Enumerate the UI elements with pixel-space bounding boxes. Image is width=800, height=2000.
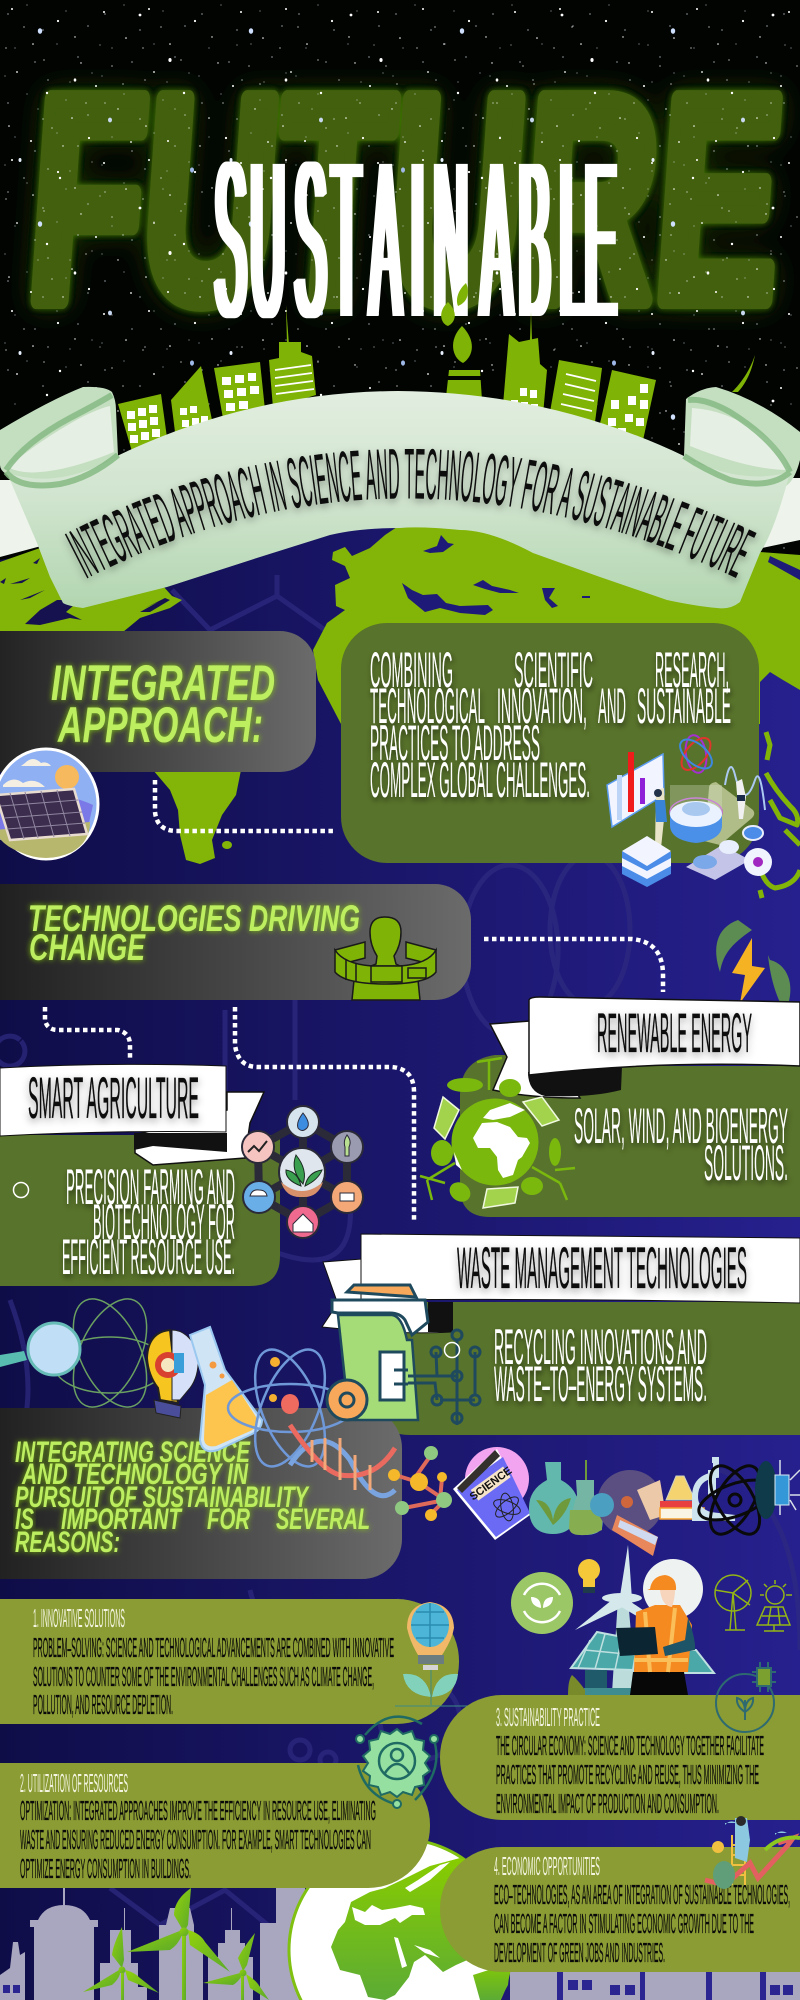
icon: bulb with plant: [578, 1559, 600, 1593]
faint background pattern: [0, 575, 800, 1935]
panel: smart agriculture: [0, 1064, 280, 1286]
engineer body: [630, 1672, 688, 1695]
text: PRECISION FARMING AND: [66, 1159, 235, 1215]
icon: black atom: [694, 1458, 776, 1542]
icon: light bulb with gears: [147, 1330, 198, 1418]
lower right buildings: [510, 1972, 800, 2000]
description text: TECHNOLOGICAL: [370, 678, 485, 734]
building 3: [214, 362, 265, 424]
heading: integrated approach: INTEGRATED: [51, 655, 275, 711]
turbine 1: [127, 1888, 230, 2000]
card 2: utilization of resources: [0, 1763, 430, 1888]
heading: integrated approach: APPROACH:: [57, 697, 263, 753]
building 1: [118, 394, 168, 455]
ribbon curl folds: [6, 395, 790, 486]
clipboard: [616, 1627, 658, 1656]
factory: [0, 1942, 25, 2000]
description text: [370, 642, 731, 808]
icon: person at screens: [335, 917, 436, 1000]
solar panels: [571, 1632, 638, 1670]
waste management text: [494, 1319, 707, 1412]
windows in buildings: [3, 1972, 793, 2000]
starfield: [0, 0, 800, 600]
wind turbine: [575, 1545, 643, 1693]
icon: recycling leaves badge: [511, 1572, 573, 1634]
card 1 body: [33, 1632, 394, 1720]
panel: integrated approach description: [341, 623, 759, 863]
text: BIOTECHNOLOGY FOR: [93, 1194, 235, 1250]
heading: technologies driving change: CHANGE: [29, 927, 146, 968]
ribbon left curl inner: [8, 406, 114, 472]
panel: waste management: [322, 1234, 800, 1435]
ribbon tails: [0, 478, 800, 557]
stepped tower 3: [208, 1908, 253, 2000]
icon: solar panel badge: [0, 749, 98, 859]
land: South America: [153, 770, 241, 864]
city skyline bottom: [0, 1888, 800, 2000]
card 3 body: [496, 1730, 764, 1819]
navy inlets on the land: [402, 535, 800, 615]
stepped tower 2: [159, 1908, 203, 2000]
icon: flask with orange liquid: [190, 1327, 262, 1451]
chimney with leaves: [441, 283, 482, 400]
icon: line-art turbine and solar panel: [715, 1575, 792, 1631]
icon: science and data isometric illustration: [607, 733, 772, 887]
icon: gear with person and arrows: [356, 1717, 438, 1808]
icon: microscope and books: [660, 1460, 735, 1519]
card 4: economic opportunities: [440, 1847, 800, 1972]
description text: COMBINING: [370, 642, 453, 698]
building 5: [503, 312, 547, 415]
ribbon band: [7, 391, 790, 608]
heading: technologies driving change: [28, 898, 360, 968]
icon: telescope and planets: [590, 1470, 666, 1556]
card 1: innovative solutions: 1. INNOVATIVE SOLUTIONS: [33, 1603, 125, 1633]
tall tower: [260, 1888, 305, 2000]
ribbon left curl: [0, 387, 118, 486]
land: Europe and Africa: [313, 525, 800, 724]
description text: AND: [598, 678, 626, 734]
icon: green earth bottom: [289, 1839, 512, 2000]
card 4 body: [494, 1879, 790, 1968]
dotted connector lines: [45, 780, 663, 1222]
heading: integrating science and technology: INTEGRATING SCIENCE: [15, 1436, 251, 1469]
small ring marker: [14, 1182, 28, 1198]
panel: integrated approach heading: [0, 631, 316, 772]
card 1 body: POLLUTION, AND RESOURCE DEPLETION.: [33, 1689, 173, 1720]
ribbon: renewable energy: [490, 997, 800, 1098]
ribbon: waste management: [322, 1234, 800, 1333]
card 2: utilization of resources: 2. UTILIZATION OF RESOURCES: [20, 1768, 128, 1798]
white halo: [643, 1559, 703, 1619]
heading: integrated approach: [51, 655, 275, 753]
icon: science book: SCIENCE: [468, 1465, 514, 1503]
text: SMART AGRICULTURE: [28, 1066, 199, 1131]
land: Asia islands: [760, 732, 800, 898]
icon: magnifying glass and green atom: [0, 1288, 166, 1418]
panel: renewable energy: [460, 997, 800, 1217]
icon: waste bin with circuit: [327, 1285, 480, 1425]
ribbon: smart agriculture: [0, 1064, 264, 1165]
icon: wind turbines: [83, 1888, 269, 2000]
card 2 body: OPTIMIZE ENERGY CONSUMPTION IN BUILDINGS.: [20, 1853, 191, 1884]
heading: integrating science and technology: PURSUIT OF SUSTAINABILITY: [15, 1481, 310, 1514]
panel: technologies driving change: [0, 884, 471, 1000]
icon: lightning with leaves: [698, 920, 790, 1031]
globe: green land masses: [0, 525, 800, 898]
globe: navy ocean: [0, 525, 800, 2000]
icon: circular plant with chip: [716, 1662, 776, 1732]
card 1: innovative solutions: [0, 1599, 459, 1724]
icon: green globe with solar panels and turbines: [420, 1058, 575, 1208]
building 2: [171, 366, 213, 440]
city skyline on the globe: [118, 283, 755, 455]
grass blade: [732, 355, 755, 392]
building 7: [599, 370, 656, 445]
hard hat and face: [660, 1590, 675, 1607]
heading: integrating science and technology: [15, 1436, 370, 1559]
icon: growth chart with ladder: [705, 1816, 800, 1889]
stepped tower 1: [100, 1908, 147, 2000]
icon: molecule: [388, 1446, 452, 1521]
description text: SCIENTIFIC: [514, 642, 593, 698]
card 2 body: [20, 1795, 376, 1884]
land: left continent: [0, 548, 182, 632]
icon: globe light bulb with leaves: [395, 1602, 470, 1706]
renewable energy text: [574, 1098, 788, 1191]
text: EFFICIENT RESOURCE USE.: [62, 1229, 235, 1285]
heading: integrating science and technology: SEVERAL: [276, 1503, 370, 1536]
heading: technologies driving change: TECHNOLOGIES DRIVING: [28, 898, 360, 939]
building 6: [550, 360, 602, 430]
ribbon right curl inner: [690, 408, 788, 470]
background: space: [0, 0, 800, 640]
title: SUSTAINABLE: SUSTAINABLE: [215, 113, 616, 366]
navy inlets on left land: [0, 558, 170, 625]
heading: integrating science and technology: IMPORTANT: [61, 1503, 183, 1536]
illustration: engineer with wind turbine and solar panels: [568, 1545, 714, 1696]
smart agriculture text: [62, 1159, 235, 1285]
land: small island: [222, 841, 232, 849]
icon: microchip: [755, 1460, 800, 1519]
dome tower: [30, 1905, 98, 2000]
ribbon banner: INTEGRATED APPROACH IN SCIENCE AND TECHNOLOGY FOR A SUSTAINABLE FUTURE: [64, 448, 760, 584]
turbine 2: [83, 1927, 159, 2000]
icon: smart farming hexagon network: [242, 1106, 363, 1238]
icon: plant flasks: [529, 1460, 603, 1535]
panel: why integration is important: [0, 1408, 402, 1579]
icon: DNA helix: [290, 1425, 395, 1496]
heading: integrating science and technology: FOR: [207, 1503, 250, 1536]
icon: science book: [453, 1447, 530, 1540]
building 4: [269, 305, 316, 408]
card 3: sustainability practice: [440, 1695, 800, 1820]
heading: integrating science and technology: IS: [15, 1503, 34, 1536]
icon: blue atom: [228, 1340, 352, 1476]
heading: integrating science and technology: AND TECHNOLOGY IN: [21, 1458, 249, 1491]
turbine 3: [203, 1933, 269, 2000]
ribbon text: [86, 498, 738, 579]
heading: integrating science and technology: REASONS:: [15, 1526, 120, 1559]
ribbon right curl: [684, 387, 800, 486]
